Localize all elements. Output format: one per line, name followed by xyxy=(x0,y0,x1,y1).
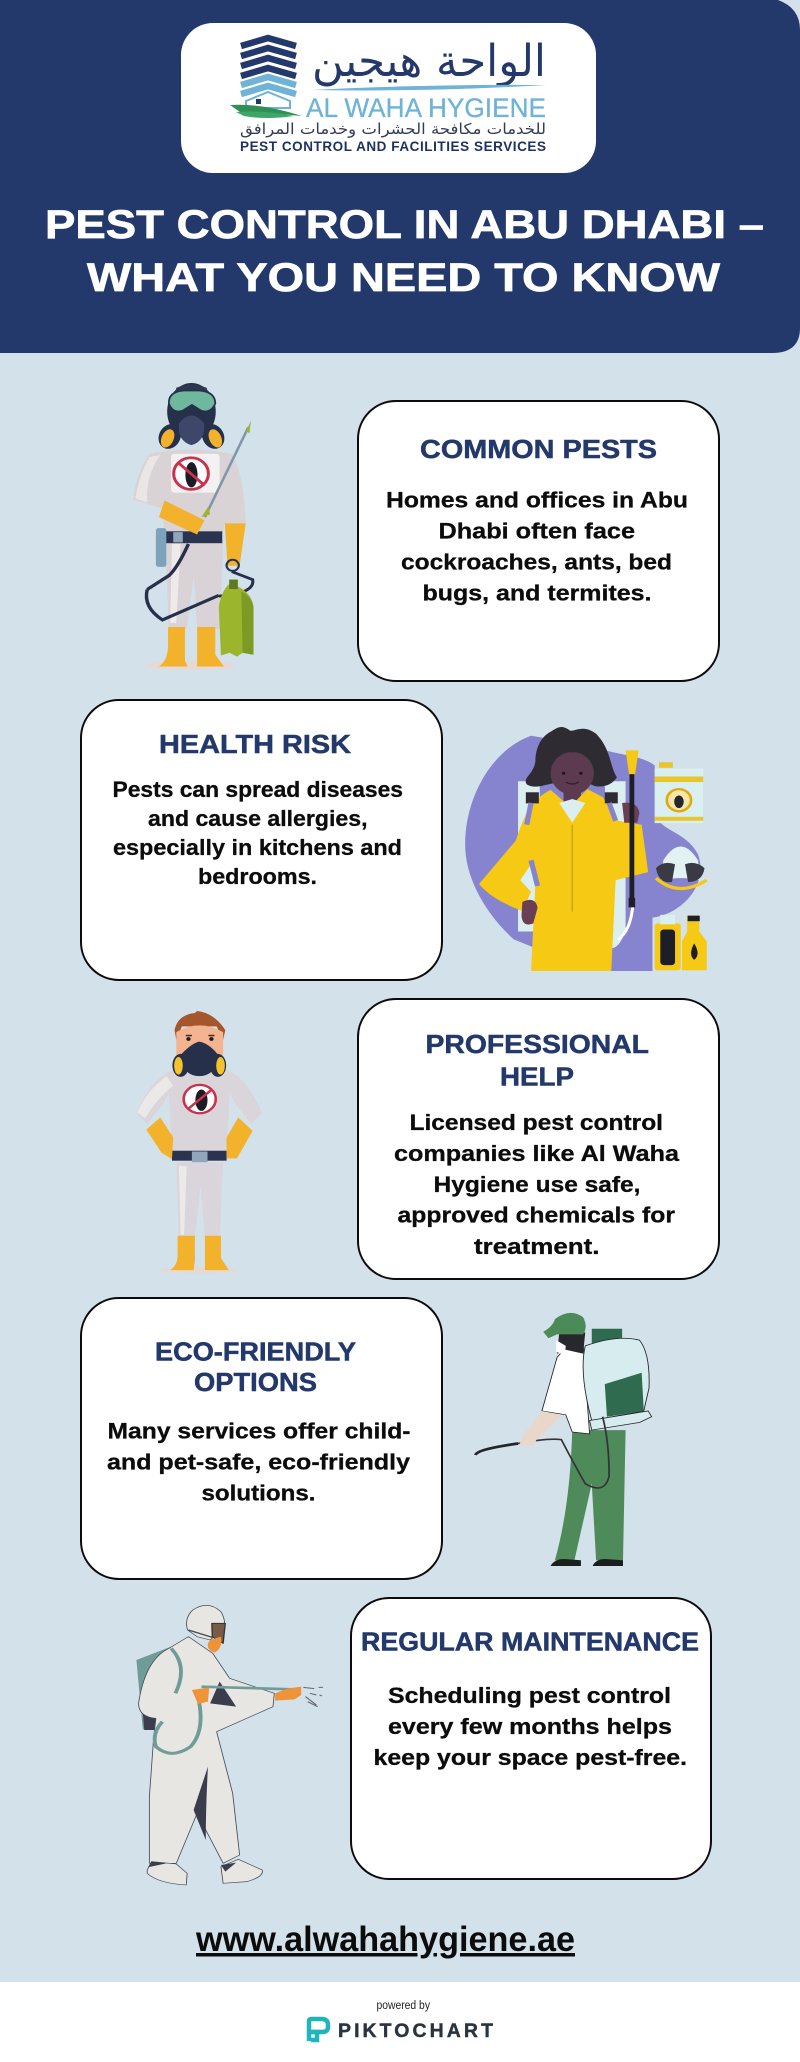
header banner xyxy=(0,0,800,353)
body text: especially in kitchens and xyxy=(113,835,402,860)
body text: companies like Al Waha xyxy=(394,1141,680,1166)
panel: eco-friendly options xyxy=(81,1298,442,1579)
heading: PROFESSIONAL xyxy=(426,1029,649,1059)
heading: COMMON PESTS xyxy=(420,434,657,464)
body text: Homes and offices in Abu xyxy=(386,488,688,512)
heading: HEALTH RISK xyxy=(159,729,351,759)
body text: and cause allergies, xyxy=(148,806,368,831)
heading: ECO-FRIENDLY xyxy=(155,1336,356,1366)
footer xyxy=(0,1982,800,2062)
piktochart wordmark: PIKTOCHART xyxy=(338,2020,493,2042)
panel: health risk xyxy=(81,700,442,980)
illustration: worker with hands on hips xyxy=(136,1011,262,1273)
body text: Scheduling pest control xyxy=(388,1683,671,1708)
powered by label: powered by xyxy=(376,2000,430,2012)
body text: treatment. xyxy=(474,1234,600,1259)
website link: www.alwahahygiene.ae xyxy=(195,1920,575,1959)
title xyxy=(45,203,764,300)
body text: Dhabi often face xyxy=(438,518,635,544)
heading: OPTIONS xyxy=(194,1367,317,1397)
body text: cockroaches, ants, bed xyxy=(401,550,672,574)
title: PEST CONTROL IN ABU DHABI – xyxy=(45,203,764,247)
panel: regular maintenance xyxy=(351,1598,711,1879)
body text: approved chemicals for xyxy=(398,1202,675,1228)
icon: piktochart logo xyxy=(309,2019,328,2041)
logo card xyxy=(181,23,596,173)
logo tagline: PEST CONTROL AND FACILITIES SERVICES xyxy=(240,139,546,154)
logo arabic name: الواحة هيجين xyxy=(312,36,546,87)
logo wave xyxy=(312,85,546,90)
body text xyxy=(107,1418,411,1506)
heading: HELP xyxy=(500,1062,574,1092)
panel: professional help xyxy=(358,999,719,1279)
logo english name: AL WAHA HYGIENE xyxy=(306,93,546,123)
body text: and pet-safe, eco-friendly xyxy=(107,1450,411,1474)
body text xyxy=(112,777,403,889)
panel: common pests xyxy=(358,401,719,681)
body text xyxy=(374,1683,687,1770)
illustration: worker with backpack sprayer xyxy=(476,1313,652,1566)
logo arabic tagline: للخدمات مكافحة الحشرات وخدمات المرافق xyxy=(240,120,546,138)
body text: every few months helps xyxy=(388,1714,672,1739)
body text: bedrooms. xyxy=(198,864,317,889)
body text xyxy=(394,1110,680,1259)
body text: Pests can spread diseases xyxy=(112,777,403,802)
icon: building logo xyxy=(230,38,302,118)
body text xyxy=(386,488,688,606)
body text: solutions. xyxy=(202,1480,316,1506)
heading xyxy=(426,1029,649,1092)
heading xyxy=(155,1336,356,1397)
body text: Hygiene use safe, xyxy=(434,1172,640,1197)
illustration: worker spraying in white suit xyxy=(136,1605,323,1885)
title: WHAT YOU NEED TO KNOW xyxy=(87,256,720,300)
illustration: woman in yellow suit xyxy=(465,727,707,971)
illustration: exterminator with green sprayer xyxy=(133,383,253,670)
heading: REGULAR MAINTENANCE xyxy=(361,1626,699,1656)
body text: bugs, and termites. xyxy=(422,580,652,606)
body text: keep your space pest-free. xyxy=(374,1745,687,1770)
body text: Licensed pest control xyxy=(410,1110,663,1135)
body text: Many services offer child- xyxy=(108,1418,410,1444)
